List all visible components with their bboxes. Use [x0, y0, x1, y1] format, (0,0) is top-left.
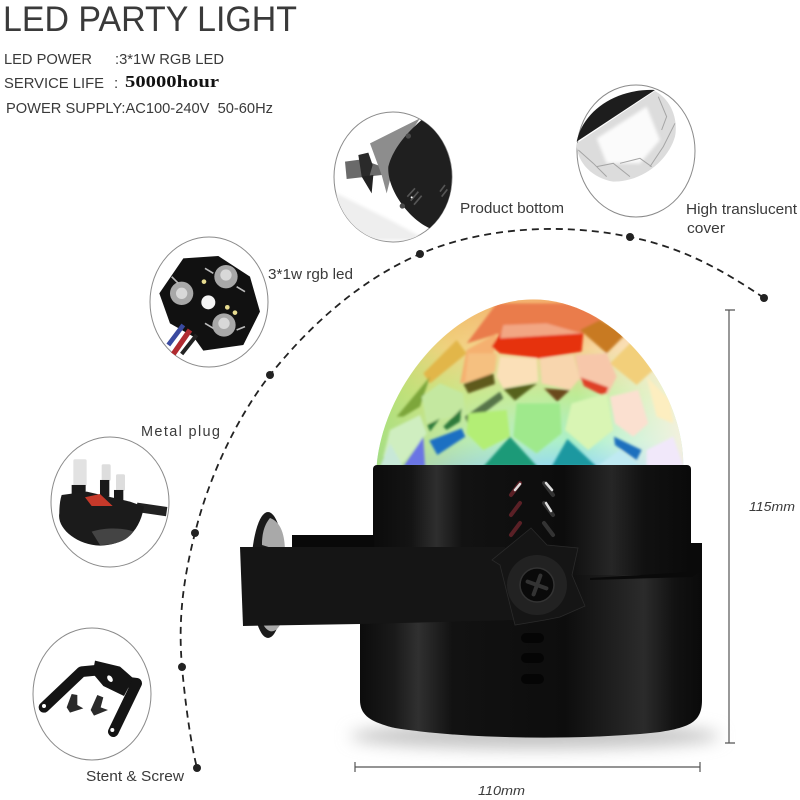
spec: LED power: LED POWER	[4, 51, 92, 68]
spec: LED power: :3*1W RGB LED	[115, 51, 224, 68]
lower vents	[521, 633, 544, 684]
spec: service life: :	[114, 75, 118, 92]
title: LED PARTY LIGHT	[3, 0, 297, 39]
label: 110mm: 110mm	[478, 784, 525, 798]
label: high translucent cover: cover	[687, 221, 725, 237]
spec: service life: SERVICE LIFE	[4, 75, 104, 92]
dashed arc with dots	[178, 229, 768, 772]
lower body	[360, 545, 702, 738]
circle: stent and screw	[33, 628, 151, 760]
star knob	[492, 528, 585, 625]
mounting disc	[251, 512, 285, 638]
upper body	[373, 465, 691, 575]
ridge on body	[590, 543, 702, 580]
floor shadow	[350, 723, 720, 749]
spec: service life	[4, 72, 220, 92]
circle: product bottom	[334, 112, 452, 242]
upper vents	[511, 483, 553, 535]
spec: service life: 50000hour	[125, 72, 220, 91]
label: rgb led: 3*1w rgb led	[268, 267, 353, 283]
party light product	[240, 297, 720, 749]
width dimension line	[355, 762, 700, 772]
label: 115mm: 115mm	[749, 500, 795, 514]
label: high translucent cover	[686, 202, 797, 237]
spec: LED power	[4, 51, 224, 68]
bracket arm	[240, 535, 520, 626]
label: stent and screw: Stent & Screw	[86, 769, 185, 785]
label: high translucent cover: High translucent	[686, 202, 797, 218]
specification list	[4, 51, 273, 117]
circle: high translucent cover	[577, 85, 695, 217]
crystal dome	[373, 297, 687, 467]
circle: metal plug	[51, 437, 169, 567]
label: product bottom: Product bottom	[460, 201, 564, 217]
circle: rgb led board	[150, 237, 268, 367]
height dimension line	[725, 310, 735, 743]
label: metal plug: Metal plug	[141, 424, 220, 440]
spec: power supply: POWER SUPPLY:AC100-240V 50-60Hz	[6, 100, 273, 117]
